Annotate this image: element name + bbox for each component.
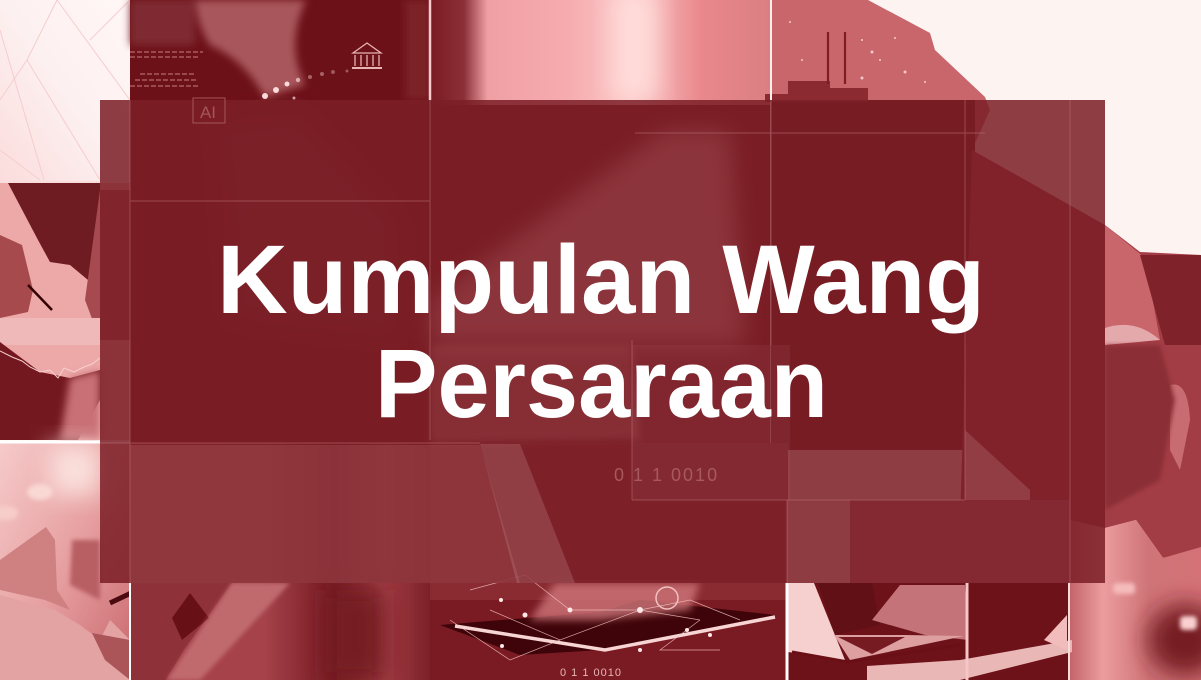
- title: Kumpulan Wang: [217, 225, 985, 334]
- tile: laptop and suit bottom right: [788, 500, 1072, 680]
- soft panel shading: [130, 130, 1070, 583]
- glowing dotted arc: [262, 70, 348, 100]
- faint binary text: 0 1 1 0010: [614, 465, 719, 485]
- translucent title panel: [100, 98, 1105, 583]
- tile: city skyline top right: [765, 0, 1040, 450]
- tile: pink bokeh top centre: [430, 0, 770, 443]
- tile: pink hand lower right: [1070, 520, 1201, 680]
- faint grid lines in panel: [100, 100, 1070, 583]
- faint AI icon: [193, 98, 225, 123]
- tile: hand writing with chart: [0, 183, 130, 440]
- title: [217, 225, 985, 438]
- title: Persaraan: [375, 329, 828, 438]
- tile: diamond pattern top left: [0, 0, 130, 182]
- tile: arm and hands right side: [960, 150, 1201, 558]
- tile: tablet network centre bottom: [430, 443, 788, 680]
- tile: hands with pen bottom left: [0, 443, 155, 680]
- icon: bank building: [352, 43, 382, 68]
- tile: rose diagonal centre bottom left: [130, 443, 430, 680]
- faint AI icon: AI: [200, 103, 216, 122]
- tile: dark suit figure top: [130, 0, 430, 443]
- tile: tablet network centre bottom: 0 1 1 0010: [560, 667, 622, 679]
